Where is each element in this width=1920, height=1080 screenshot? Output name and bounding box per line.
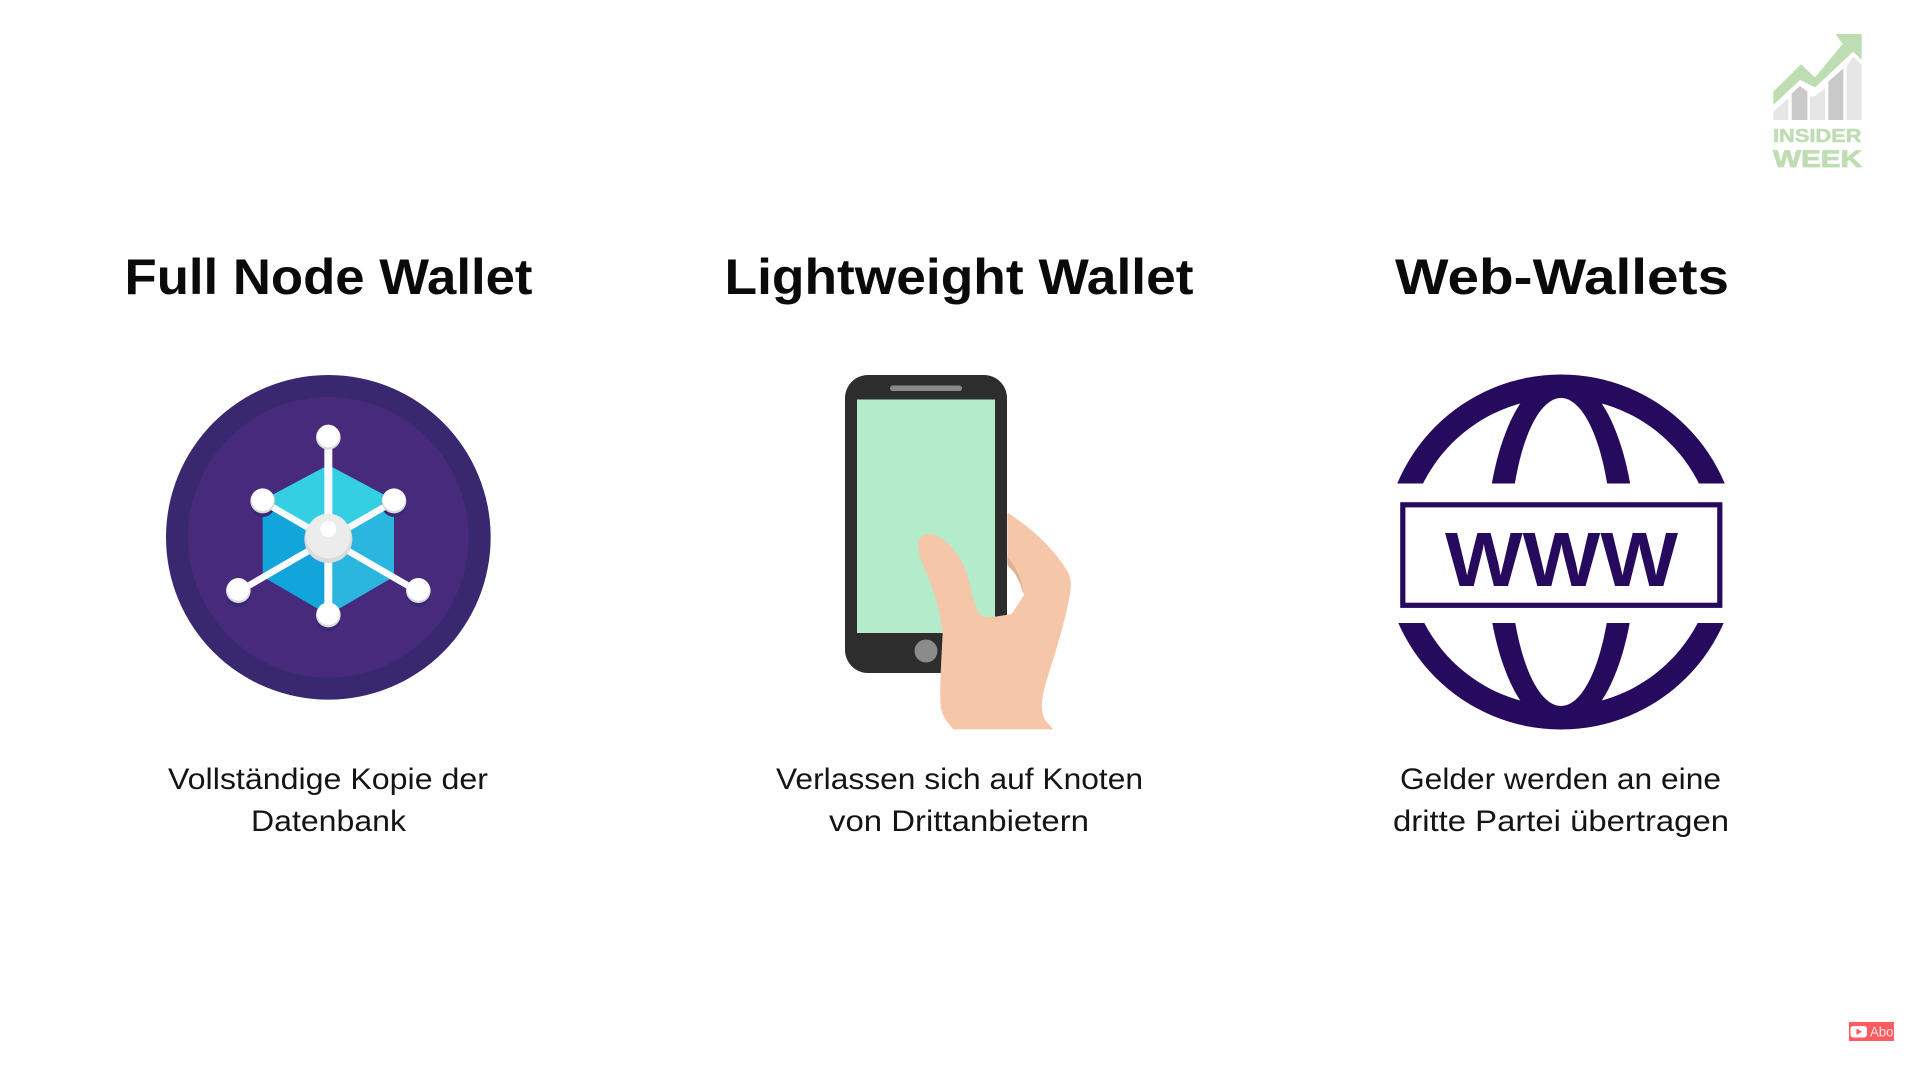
logo wordmark: INSIDER [1773, 126, 1862, 146]
description: Vollständige Kopie der Datenbank: Datenbank [251, 805, 406, 838]
panel: Web-Wallets [1384, 249, 1738, 838]
description: Gelder werden an eine dritte Partei übertragen: dritte Partei übertragen [1393, 805, 1729, 838]
heading: Full Node Wallet: Full Node Wallet [124, 249, 533, 305]
panel: Full Node Wallet [124, 249, 533, 838]
description: Verlassen sich auf Knoten von Drittanbietern [776, 763, 1143, 838]
logo wordmark [1773, 126, 1863, 173]
description: Verlassen sich auf Knoten von Drittanbietern: von Drittanbietern [829, 805, 1089, 838]
description: Verlassen sich auf Knoten von Drittanbietern: Verlassen sich auf Knoten [776, 763, 1143, 796]
logo wordmark: WEEK [1773, 146, 1863, 173]
subscribe badge [1849, 1022, 1894, 1041]
logo chart icon [1773, 34, 1862, 120]
description: Gelder werden an eine dritte Partei übertragen [1393, 763, 1729, 838]
icon: node network cube [166, 375, 491, 700]
subscribe badge: Abo [1870, 1024, 1894, 1040]
heading: Web-Wallets: Web-Wallets [1395, 249, 1729, 305]
description: Gelder werden an eine dritte Partei übertragen: Gelder werden an eine [1400, 763, 1721, 796]
description: Vollständige Kopie der Datenbank [168, 763, 488, 838]
icon: hand holding phone [845, 375, 1071, 729]
panel: Lightweight Wallet [724, 249, 1194, 838]
logo: Insider Week [1773, 34, 1863, 173]
icon: globe with www [1384, 374, 1738, 730]
icon: globe with www: WWW [1445, 517, 1678, 603]
description: Vollständige Kopie der Datenbank: Vollständige Kopie der [168, 763, 488, 796]
heading: Lightweight Wallet: Lightweight Wallet [724, 249, 1194, 305]
